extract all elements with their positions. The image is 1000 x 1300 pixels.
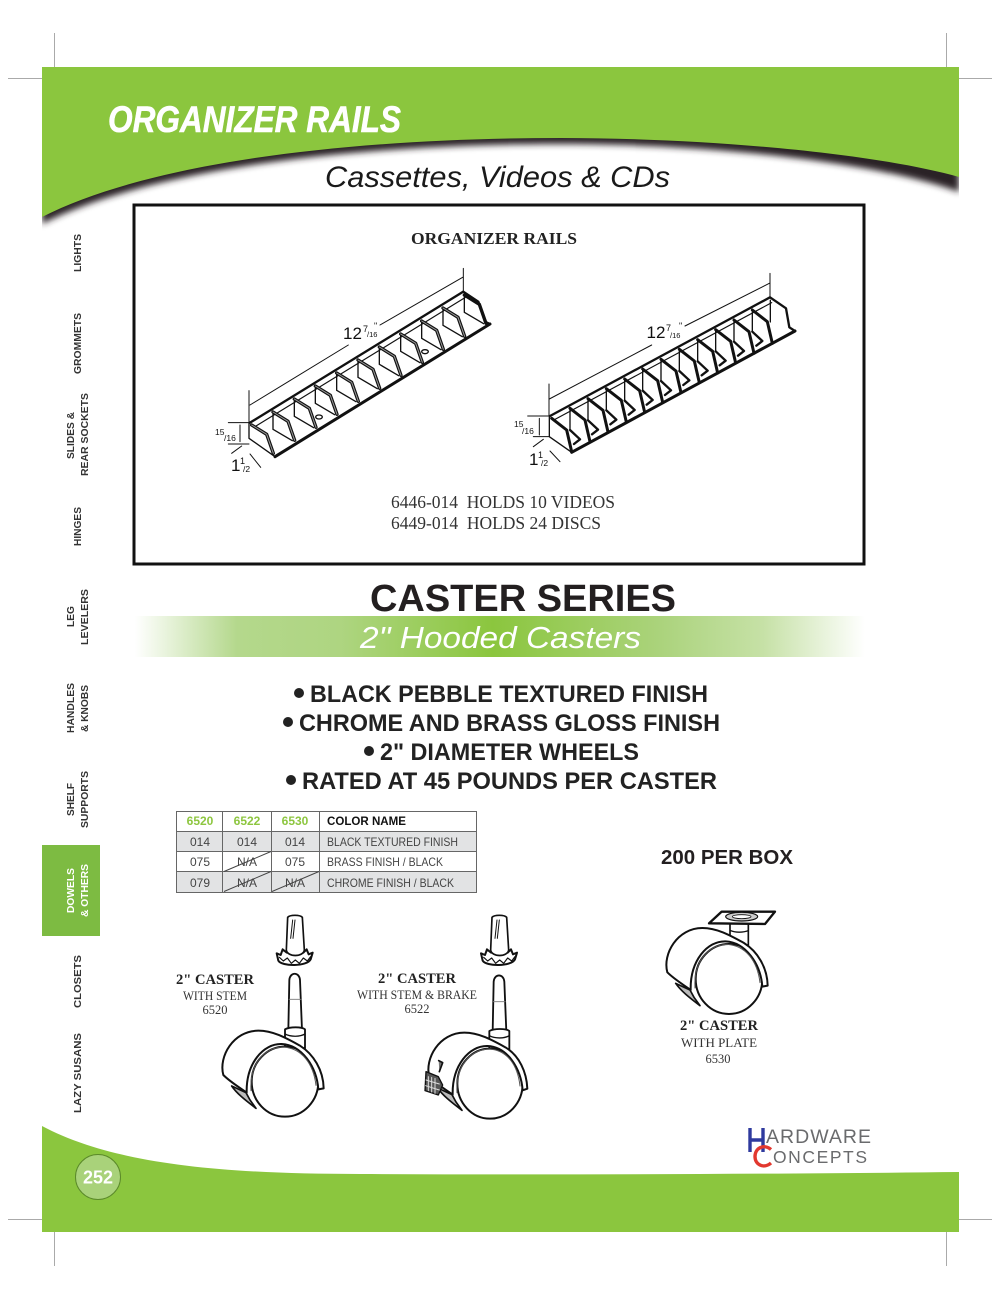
diagram: rail holding 10 videos: 12	[343, 324, 362, 343]
colour finish table: 6520	[187, 814, 214, 828]
diagram: rail holding 10 videos: 1	[231, 456, 240, 475]
sidebar category tabs: GROMMETS	[72, 313, 84, 374]
sidebar category tabs: & KNOBS	[79, 685, 91, 732]
colour finish table: 079	[190, 876, 210, 890]
sidebar category tabs: LIGHTS	[72, 234, 84, 272]
caster label: WITH STEM	[183, 989, 247, 1003]
colour finish table: 014	[190, 835, 210, 849]
diagram: rail holding 10 videos: 15	[215, 427, 225, 437]
caster label: 6522	[404, 1002, 430, 1016]
page number badge	[76, 1154, 120, 1200]
brake pedal	[425, 1061, 443, 1095]
heading: caster series: CASTER SERIES	[370, 578, 676, 620]
colour finish table: 014	[285, 835, 305, 849]
sidebar category tabs: HANDLES	[65, 683, 77, 733]
colour finish table: 014	[237, 835, 257, 849]
sidebar category tabs: REAR SOCKETS	[79, 393, 91, 476]
header banner	[42, 67, 959, 224]
caster label: WITH STEM & BRAKE	[357, 988, 477, 1002]
colour finish table: 075	[190, 855, 210, 869]
footer banner	[42, 1126, 959, 1232]
feature bullets: CHROME AND BRASS GLOSS FINISH	[299, 710, 720, 737]
caster label	[357, 971, 477, 1016]
logo: Hardware Concepts	[750, 1126, 871, 1167]
diagram: rail holding 24 discs: 12	[646, 323, 665, 342]
colour finish table: 6522	[234, 814, 261, 828]
caster with stem and brake 6522	[357, 915, 527, 1119]
sidebar category tabs: DOWELS	[65, 868, 77, 913]
title: ORGANIZER RAILS	[108, 99, 401, 140]
sidebar category tabs: SHELF	[65, 782, 77, 816]
caster label: WITH PLATE	[681, 1036, 757, 1050]
colour finish table: COLOR NAME	[327, 814, 406, 828]
caster with stem 6520	[176, 915, 324, 1117]
subheading band: 2" Hooded Casters	[359, 620, 641, 655]
colour finish table: 6530	[282, 814, 309, 828]
part numbers: 6449-014 HOLDS 24 DISCS	[391, 513, 601, 533]
diagram: rail holding 10 videos: /16	[367, 330, 377, 339]
sidebar category tabs: LEVELERS	[79, 589, 91, 645]
caster with plate 6530	[666, 912, 775, 1066]
diagram: rail holding 24 discs: /2	[541, 458, 548, 468]
caster label	[176, 972, 254, 1017]
colour finish table: N/A	[237, 855, 257, 869]
part numbers	[391, 492, 615, 533]
caster label	[680, 1018, 758, 1066]
diagram: rail holding 24 discs: 15	[514, 419, 524, 429]
diagram: rail holding 24 discs: /16	[522, 426, 534, 436]
sidebar category tabs: HINGES	[72, 507, 84, 546]
sidebar category tabs: SLIDES &	[65, 412, 77, 459]
diagram: rail holding 24 discs: 1	[538, 450, 543, 460]
sidebar category tabs: CLOSETS	[72, 955, 84, 1008]
diagram: rail holding 24 discs: /16	[670, 331, 680, 340]
part numbers: 6446-014 HOLDS 10 VIDEOS	[391, 492, 615, 512]
diagram: rail holding 24 discs: "	[679, 321, 682, 331]
colour finish table: BRASS FINISH / BLACK	[327, 855, 443, 869]
diagram: rail holding 24 discs	[514, 273, 795, 469]
diagram: rail holding 10 videos	[215, 268, 490, 475]
feature bullets: 2" DIAMETER WHEELS	[380, 739, 639, 766]
colour finish table: N/A	[237, 876, 257, 890]
diagram: rail holding 10 videos: /16	[224, 433, 236, 443]
caster label: 2" CASTER	[680, 1018, 758, 1034]
caster label: 2" CASTER	[176, 972, 254, 988]
sidebar category tabs	[42, 234, 100, 1113]
box quantity note: 200 PER BOX	[661, 847, 794, 869]
diagram: rail holding 10 videos: 7	[363, 324, 368, 334]
sidebar category tabs: SUPPORTS	[79, 771, 91, 828]
caster label: 6520	[202, 1003, 228, 1017]
logo: Hardware Concepts: ARDWARE	[766, 1126, 871, 1148]
panel heading: ORGANIZER RAILS	[411, 229, 577, 248]
logo: Hardware Concepts: ONCEPTS	[773, 1147, 867, 1167]
feature bullets: RATED AT 45 POUNDS PER CASTER	[302, 768, 717, 795]
colour finish table: CHROME FINISH / BLACK	[327, 876, 454, 890]
diagram: rail holding 10 videos: "	[374, 321, 377, 331]
caster label: 2" CASTER	[378, 971, 456, 987]
subtitle: Cassettes, Videos & CDs	[325, 161, 670, 194]
colour finish table: N/A	[285, 876, 305, 890]
sidebar category tabs: LAZY SUSANS	[72, 1033, 84, 1113]
sidebar category tabs: LEG	[65, 606, 77, 627]
panel: organizer rails	[134, 205, 864, 564]
sidebar category tabs: & OTHERS	[79, 864, 91, 917]
colour finish table	[176, 812, 476, 892]
page number badge: 252	[83, 1168, 113, 1188]
diagram: rail holding 10 videos: /2	[243, 464, 250, 474]
diagram: rail holding 24 discs: 7	[666, 323, 671, 333]
feature bullets	[283, 681, 720, 795]
colour finish table: 075	[285, 855, 305, 869]
feature bullets: BLACK PEBBLE TEXTURED FINISH	[310, 681, 708, 708]
diagram: rail holding 24 discs: 1	[529, 450, 538, 469]
caster label: 6530	[706, 1052, 730, 1066]
diagram: rail holding 10 videos: 1	[240, 456, 245, 466]
subheading band	[135, 616, 865, 657]
colour finish table: BLACK TEXTURED FINISH	[327, 835, 458, 849]
